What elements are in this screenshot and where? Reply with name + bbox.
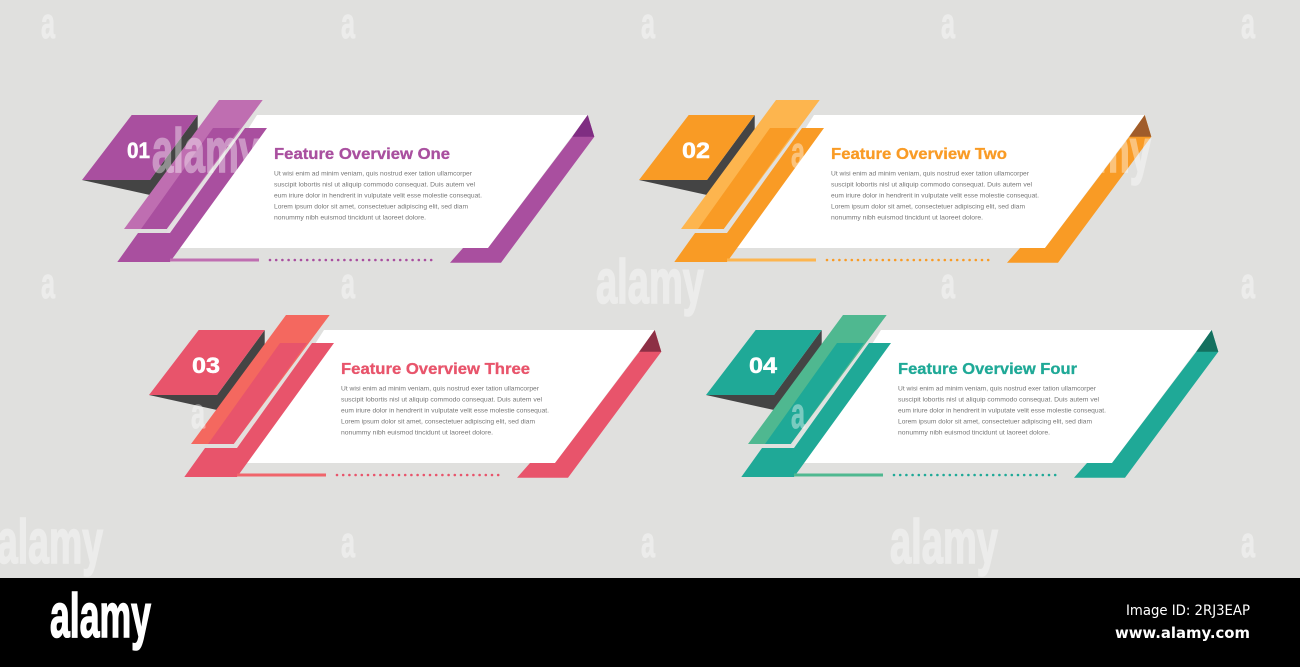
watermarks: alamy <box>0 508 103 577</box>
bar overlay <box>698 128 797 229</box>
body text: eum iriure dolor in hendrerit in vulputate velit esse molestie consequat. <box>898 408 1106 414</box>
body text: Ut wisi enim ad minim veniam, quis nostrud exer tation ullamcorper <box>274 170 473 178</box>
body text: nonummy nibh euismod tincidunt ut laoreet dolore. <box>341 430 493 436</box>
number block side <box>82 115 198 195</box>
number block side <box>639 115 755 195</box>
watermarks: a <box>641 518 655 567</box>
watermarks: a <box>1241 0 1255 48</box>
body text <box>341 386 549 436</box>
lower stripe <box>741 343 891 477</box>
light bar <box>748 315 887 444</box>
body text: nonummy nibh euismod tincidunt ut laoreet dolore. <box>274 214 426 222</box>
panel: feature two <box>639 100 1151 263</box>
body text: nonummy nibh euismod tincidunt ut laoreet dolore. <box>898 430 1050 436</box>
body text: nonummy nibh euismod tincidunt ut laoreet dolore. <box>831 214 983 222</box>
watermarks: a <box>341 259 355 308</box>
watermarks: a <box>941 0 955 48</box>
body text: suscipit lobortis nisl ut aliquip commodo consequat. Duis autem vel <box>898 396 1100 404</box>
number block <box>82 115 198 180</box>
body text: eum iriure dolor in hendrerit in vulputate velit esse molestie consequat. <box>341 408 549 414</box>
ribbon: right edge <box>450 115 594 263</box>
body text <box>274 170 482 222</box>
watermarks: alamy <box>596 248 704 317</box>
light bar <box>681 100 820 229</box>
ribbon: fold <box>1196 330 1218 352</box>
light bar <box>124 100 263 229</box>
body text: eum iriure dolor in hendrerit in vulputate velit esse molestie consequat. <box>831 192 1039 200</box>
dotted line <box>827 259 989 261</box>
bottom line <box>170 258 259 262</box>
number block <box>149 330 265 395</box>
body text <box>898 386 1106 436</box>
light bar <box>191 315 330 444</box>
dotted line <box>894 474 1056 476</box>
watermarks: alamy <box>152 117 260 186</box>
ribbon: fold <box>639 330 661 352</box>
panel: feature four <box>706 315 1218 478</box>
body text: Lorem ipsum dolor sit amet, consectetuer adipiscing elit, sed diam <box>831 204 1026 210</box>
lower stripe <box>117 128 267 262</box>
footer bar <box>0 578 1300 667</box>
heading: Feature Overview Four <box>898 361 1077 378</box>
watermarks: a <box>641 0 655 48</box>
bar overlay <box>141 128 240 229</box>
card: feature four background <box>796 330 1212 463</box>
lower stripe <box>674 128 824 262</box>
watermarks: a <box>41 259 55 308</box>
panel: feature one <box>82 100 594 263</box>
body text: Lorem ipsum dolor sit amet, consectetuer adipiscing elit, sed diam <box>898 418 1093 426</box>
dotted line <box>270 259 432 261</box>
watermarks: a <box>341 518 355 567</box>
watermarks: alamy <box>890 508 998 577</box>
bottom line <box>794 474 883 476</box>
watermarks: a <box>791 128 805 177</box>
body text: suscipit lobortis nisl ut aliquip commodo consequat. Duis autem vel <box>831 182 1033 188</box>
body text: Ut wisi enim ad minim veniam, quis nostrud exer tation ullamcorper <box>898 386 1097 392</box>
body text: suscipit lobortis nisl ut aliquip commodo consequat. Duis autem vel <box>274 182 476 188</box>
watermarks: a <box>191 389 205 438</box>
ribbon: right edge <box>517 330 661 478</box>
number: 02 <box>682 138 710 163</box>
watermarks: a <box>341 0 355 48</box>
lower stripe <box>184 343 334 477</box>
number: 03 <box>192 353 220 378</box>
logo: alamy <box>50 582 151 651</box>
watermarks: a <box>41 0 55 48</box>
number: 04 <box>749 353 778 378</box>
body text: Lorem ipsum dolor sit amet, consectetuer adipiscing elit, sed diam <box>274 204 469 210</box>
number block side <box>149 330 265 410</box>
body text <box>831 170 1039 222</box>
heading: Feature Overview Two <box>831 146 1007 163</box>
number block <box>706 330 822 395</box>
panel: feature three <box>149 315 661 478</box>
body text: Ut wisi enim ad minim veniam, quis nostrud exer tation ullamcorper <box>831 170 1030 178</box>
dotted line <box>337 474 499 476</box>
ribbon: right edge <box>1074 330 1218 478</box>
ribbon: fold <box>1129 115 1151 137</box>
card: feature one background <box>172 115 588 248</box>
website: www.alamy.com <box>1115 624 1250 642</box>
watermarks: a <box>1241 259 1255 308</box>
bar overlay <box>208 343 307 444</box>
body text: eum iriure dolor in hendrerit in vulputate velit esse molestie consequat. <box>274 192 482 200</box>
image id: Image ID: 2RJ3EAP <box>1126 603 1250 619</box>
ribbon: fold <box>572 115 594 137</box>
heading: Feature Overview Three <box>341 361 530 378</box>
ribbon: right edge <box>1007 115 1151 263</box>
bottom line <box>727 258 816 262</box>
bar overlay <box>765 343 864 444</box>
body text: suscipit lobortis nisl ut aliquip commodo consequat. Duis autem vel <box>341 396 543 404</box>
heading: Feature Overview One <box>274 146 450 163</box>
card: feature three background <box>239 330 655 463</box>
watermarks: a <box>941 259 955 308</box>
body text: Ut wisi enim ad minim veniam, quis nostrud exer tation ullamcorper <box>341 386 540 392</box>
body text: Lorem ipsum dolor sit amet, consectetuer adipiscing elit, sed diam <box>341 418 536 426</box>
watermarks: a <box>791 389 805 438</box>
watermarks: alamy <box>1043 117 1151 186</box>
watermarks: a <box>1241 518 1255 567</box>
card: feature two background <box>729 115 1145 248</box>
number block side <box>706 330 822 410</box>
number: 01 <box>127 138 150 163</box>
bottom line <box>237 474 326 476</box>
number block <box>639 115 755 180</box>
